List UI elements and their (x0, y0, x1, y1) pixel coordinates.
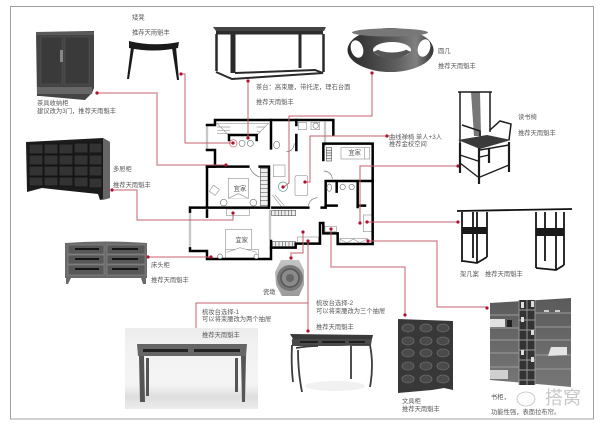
label: tea table: 茶台：高束腰，带托泥，理石台面 (256, 82, 350, 91)
label: round stool: 推荐天雨魁丰 (438, 61, 476, 70)
label: multi-drawer cabinet: 多屉柜 (113, 164, 132, 173)
label: reading chair: 读书椅 (518, 112, 538, 121)
furniture: dresser option 1 (125, 328, 258, 409)
windows (190, 122, 373, 248)
label: zen chair: 曲线禅椅 单人+3人 (389, 132, 443, 141)
furniture: long table (457, 209, 572, 270)
furniture: porcelain stool (275, 260, 304, 296)
label: bedside cabinet: 床头柜 (151, 260, 170, 269)
label: long table: 架几案 (460, 269, 480, 278)
label: multi-drawer cabinet (113, 164, 151, 189)
label: stool: 矮凳 (132, 12, 145, 22)
label: tea storage cabinet: 建议改为3门，推荐天雨魁丰 (37, 106, 116, 115)
label: bookcase (491, 392, 560, 416)
furniture: tea table (213, 27, 326, 79)
label: round stool (438, 47, 476, 70)
label: dresser option 2 (316, 298, 385, 331)
furniture: stationery cabinet (398, 319, 453, 393)
room labels (234, 148, 362, 244)
connector end dots (95, 71, 489, 342)
label: bookcase: 书柜， (491, 392, 510, 401)
label: tea table: 推荐天雨魁丰 (256, 97, 294, 106)
shelving ladders (260, 148, 332, 247)
label: bedside cabinet: 推荐天雨魁丰 (151, 275, 189, 284)
watermark (517, 388, 581, 408)
furniture: bookcase (490, 298, 571, 387)
room labels: 宜家 (348, 148, 362, 157)
label: tea storage cabinet (37, 98, 116, 115)
fixtures (218, 123, 354, 259)
furniture outlines (209, 122, 373, 258)
label: porcelain stool: 瓷墩 (263, 287, 276, 296)
furniture: reading chair (458, 92, 511, 184)
label: long table (460, 269, 523, 278)
walls (190, 120, 373, 259)
label: dresser option 2: 可以将束腰改为三个抽屉 (316, 306, 385, 315)
furniture: bedside cabinet (65, 242, 147, 284)
label: stool: 推荐天雨魁丰 (132, 28, 170, 36)
room labels: 宜家 (235, 235, 249, 244)
connector lines (97, 73, 487, 340)
watermark: 搭窝 (545, 388, 581, 408)
label: dresser option 2: 推荐天雨魁丰 (316, 322, 354, 331)
label: reading chair: 推荐天雨魁丰 (518, 128, 556, 137)
floor plan (190, 120, 373, 259)
label: long table: 推荐天雨魁丰 (485, 269, 523, 278)
furniture: round stool (348, 28, 434, 72)
label: dresser option 1 (202, 307, 271, 339)
label: round stool: 圆几 (438, 47, 451, 55)
label: bookcase: 功能性强，表面拉布帘。 (491, 407, 560, 416)
label: dresser option 1: 梳妆台选择-1 (202, 307, 240, 316)
room labels: 宜家 (234, 184, 247, 193)
label: tea storage cabinet: 茶具收纳柜 (37, 98, 68, 107)
label: zen chair: 推荐金校空间 (389, 139, 427, 148)
label: stationery cabinet (402, 396, 440, 413)
furniture: dresser option 2 (290, 334, 373, 392)
furniture: multi-drawer cabinet (26, 138, 110, 200)
label: stationery cabinet: 推荐天雨魁丰 (402, 404, 440, 413)
label: bedside cabinet (151, 260, 189, 284)
label: tea table (256, 82, 350, 106)
label: stationery cabinet: 文具柜 (402, 396, 421, 405)
label: dresser option 1: 推荐天雨魁丰 (202, 330, 240, 339)
label: stool (132, 12, 170, 36)
label: dresser option 1: 可以将束腰改为两个抽屉 (202, 314, 271, 323)
furniture: tea storage cabinet (36, 31, 94, 100)
furniture: stool (127, 41, 179, 80)
label: dresser option 2: 梳妆台选择-2 (316, 298, 354, 307)
label: zen chair (389, 132, 443, 148)
label: reading chair (518, 112, 556, 137)
label: multi-drawer cabinet: 推荐天雨魁丰 (113, 180, 151, 189)
